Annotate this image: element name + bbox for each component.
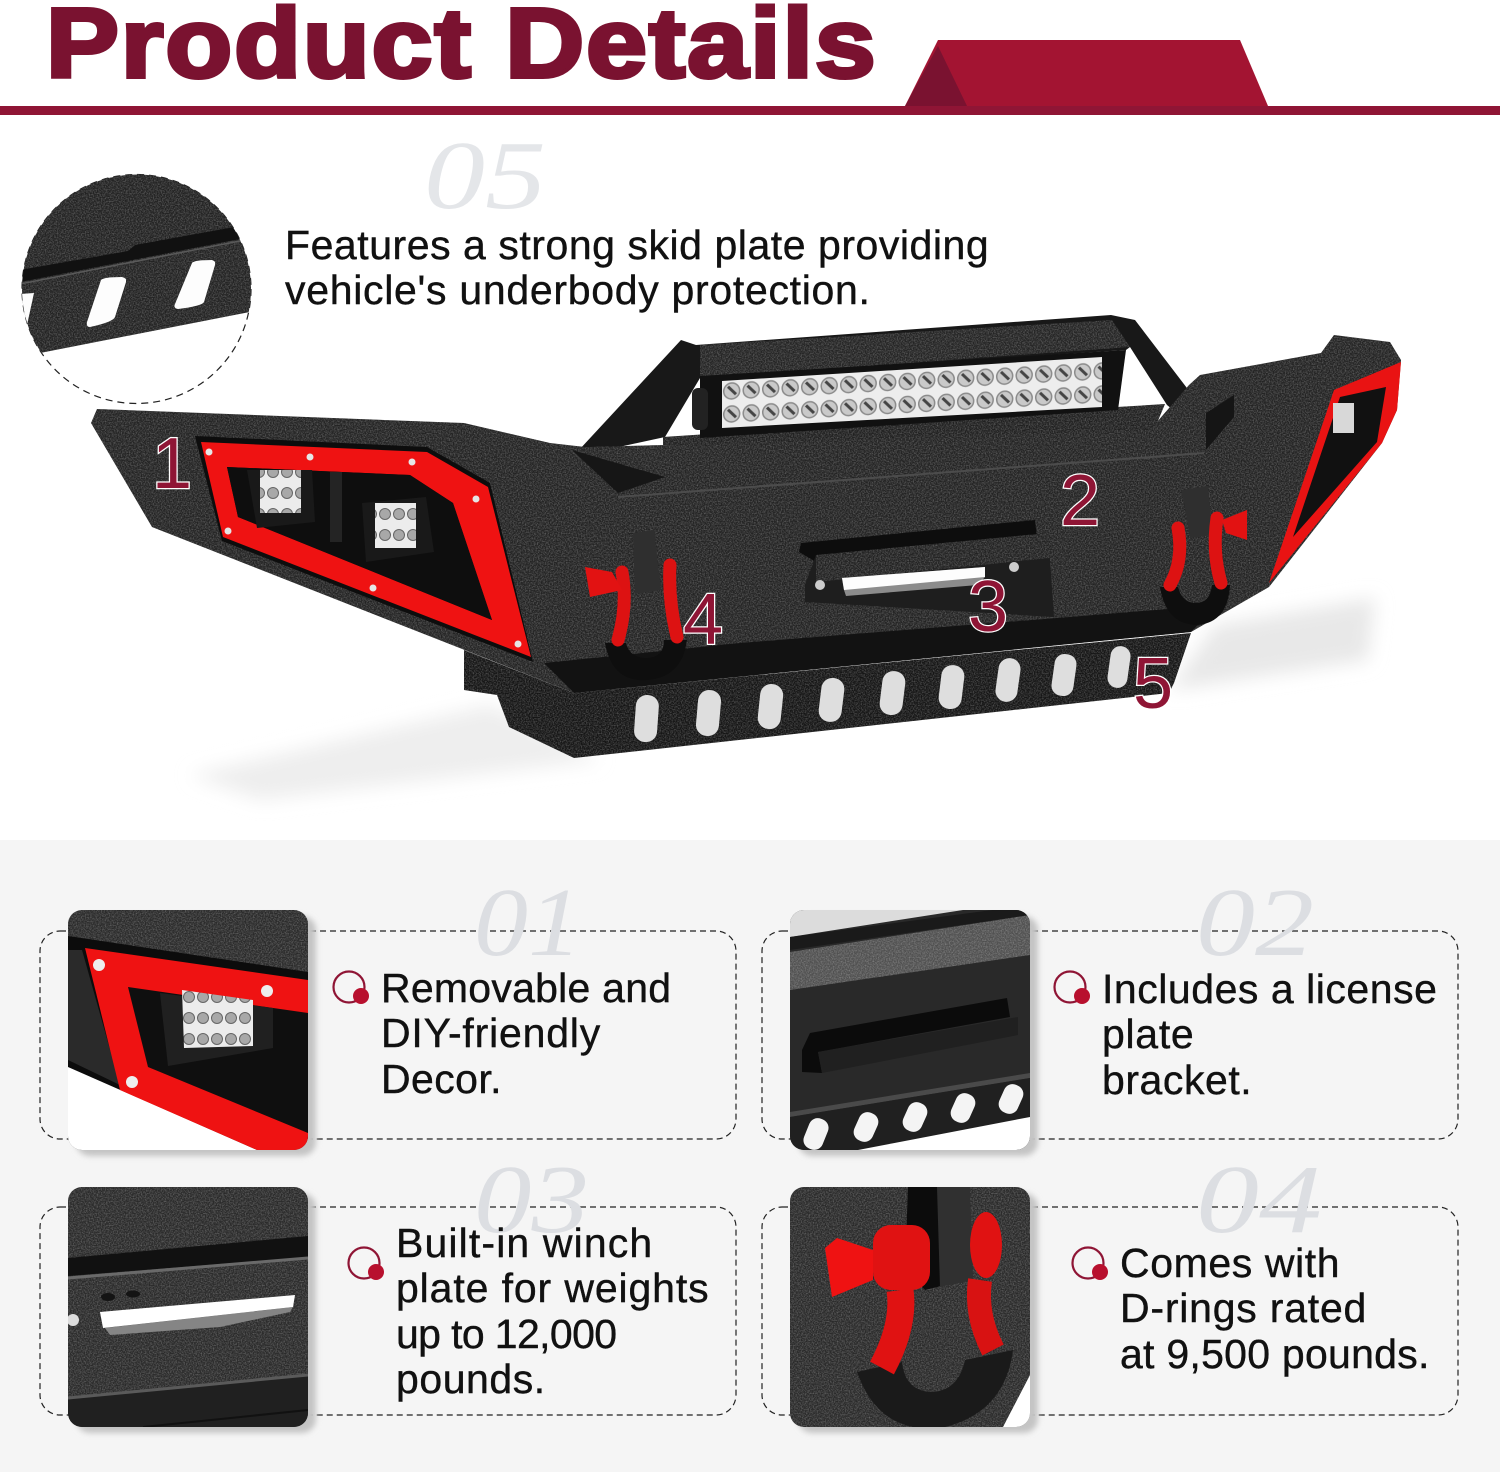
text: feature 03: up to 12,000 [396,1311,616,1357]
callout numbers 1 to 5 [152,424,1173,724]
text: feature 03 [396,1220,710,1402]
icon: skid plate detail circle [20,170,255,404]
light bar frame [579,315,1206,457]
lower dark band [544,605,1217,693]
skid plate caption: vehicle's underbody protection. [285,267,871,313]
photo 2: license bracket [790,905,1030,1153]
right red frame [1269,362,1401,583]
photo 4: D-ring [790,1187,1030,1428]
text: feature 01 [381,965,671,1102]
text: feature 02: Includes a license [1102,966,1437,1012]
callout numbers 1 to 5: 1 [152,424,192,504]
ghost numbers: 02 [1196,869,1314,977]
callout numbers 1 to 5: 2 [1060,461,1100,541]
bumper illustration [91,315,1401,758]
text: feature 01: DIY-friendly [381,1010,601,1056]
skid slots [633,645,1132,743]
ghost number 05: 05 [424,122,546,230]
ghost numbers: 01 [474,869,582,977]
text: feature 04: D-rings rated [1120,1285,1367,1331]
photo 1: decor frame [68,910,308,1150]
ghost numbers: 04 [1196,1146,1322,1254]
left red frame [201,442,531,657]
bumper shadow [190,598,1375,800]
image shadows [76,916,1038,1433]
right D-ring [1160,486,1247,625]
callout numbers 1 to 5: 4 [683,580,723,660]
text: feature 03: pounds. [396,1356,546,1402]
skid plate caption: Features a strong skid plate providing [285,222,989,268]
left D-ring [585,530,687,680]
callout numbers 1 to 5: 3 [968,567,1008,647]
skid plate [464,633,1191,758]
text: feature 01: Decor. [381,1056,502,1102]
text: feature 04: at 9,500 pounds. [1120,1331,1430,1377]
feature box frames [40,931,1458,1415]
text: feature 02: plate [1102,1011,1194,1057]
icon: bullets [334,972,1104,1278]
callout numbers 1 to 5: 5 [1133,644,1173,724]
lower panel background [0,840,1500,1472]
text: feature 03: Built-in winch [396,1220,653,1266]
text: feature 04 [1120,1240,1430,1377]
text: feature 03: plate for weights [396,1265,710,1311]
bumper body [91,335,1401,693]
left lamp housing [195,436,533,662]
text: feature 02 [1102,966,1437,1103]
photo 3: winch plate [67,1187,308,1427]
ghost numbers: 03 [474,1146,589,1254]
text: feature 02: bracket. [1102,1057,1252,1103]
skid plate caption [284,222,989,313]
winch plate [799,520,1054,617]
left work lights [260,470,301,513]
text: feature 04: Comes with [1120,1240,1340,1286]
ghost numbers [474,869,1322,1254]
text: feature 01: Removable and [381,965,671,1011]
header band [0,40,1500,115]
